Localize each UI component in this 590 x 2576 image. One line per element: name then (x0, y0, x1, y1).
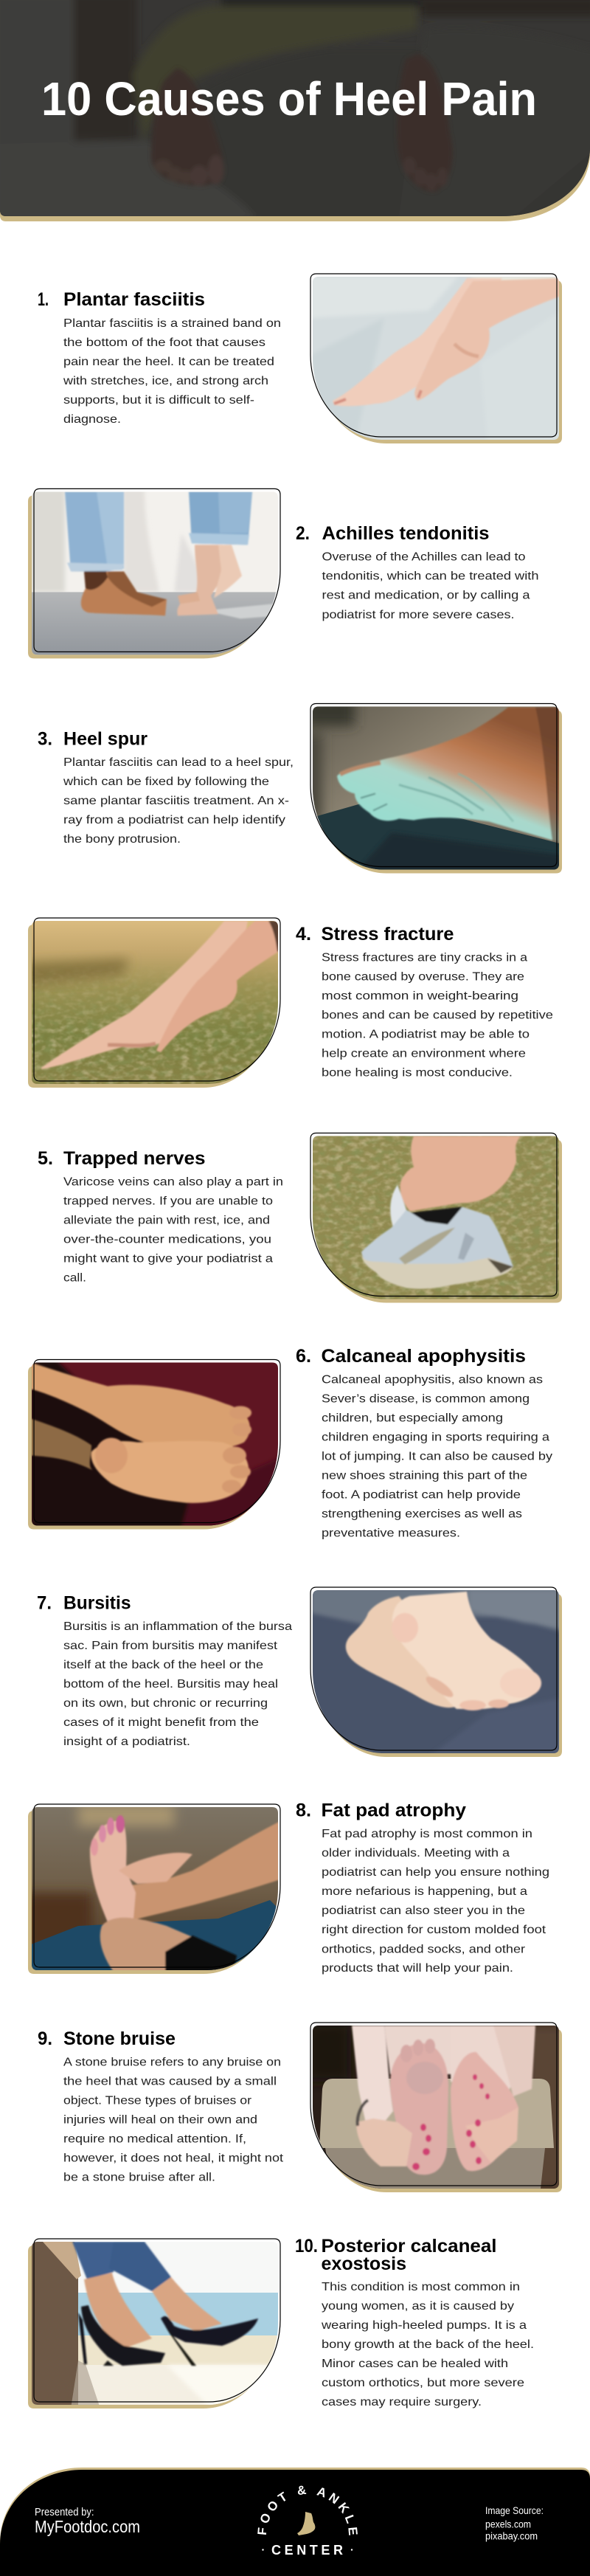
body text 2: tendonitis, which can be treated with (322, 570, 538, 583)
body text 7: Bursitis is an inflammation of the bursa (63, 1620, 292, 1633)
body text 4: bone healing is most conducive. (322, 1067, 513, 1080)
body text 8: right direction for custom molded foot (322, 1924, 546, 1936)
body text 5: call. (63, 1272, 86, 1284)
presented by (35, 2507, 140, 2536)
body text 8: older individuals. Meeting with a (322, 1847, 510, 1860)
body text 9: however, it does not heal, it might not (63, 2152, 284, 2165)
body text 3: Plantar fasciitis can lead to a heel spur, (63, 756, 294, 769)
body text 8: orthotics, padded socks, and other (322, 1944, 526, 1955)
logo: Foot & Ankle Center: FOOT & ANKLE (257, 2485, 358, 2535)
body text 10 (321, 2281, 534, 2408)
body text 3: which can be fixed by following the (63, 776, 269, 788)
photo 3: foot sole with teal lighting (303, 697, 565, 874)
body text 3 (63, 756, 294, 846)
body text 3: the bony protrusion. (63, 833, 181, 846)
photo 9: soles resting on a beige stool, pink nails (307, 2023, 569, 2192)
heading 8: 8. (296, 1800, 311, 1821)
body text 8: podiatrist can help you ensure nothing (322, 1866, 549, 1879)
image source: pixabay.com (485, 2530, 538, 2542)
icon: gold foot (297, 2512, 315, 2535)
body text 5: might want to give your podiatrist a (63, 1253, 273, 1265)
photo 10: high heels by the sea (28, 2239, 285, 2408)
body text 10: wearing high-heeled pumps. It is a (321, 2319, 527, 2332)
body text 5: Varicose veins can also play a part in (63, 1176, 283, 1188)
logo: Foot & Ankle Center: CENTER (271, 2543, 343, 2558)
body text 10: This condition is most common in (322, 2281, 520, 2293)
body text 10: Minor cases can be healed with (322, 2358, 508, 2370)
heading 4: 4. (296, 924, 311, 945)
heading 5: Trapped nerves (63, 1148, 205, 1169)
body text 10: cases may require surgery. (322, 2396, 482, 2408)
body text 1: with stretches, ice, and strong arch (63, 375, 268, 387)
image source (485, 2504, 544, 2542)
heading 9: 9. (38, 2028, 52, 2049)
heading 10: exostosis (322, 2254, 406, 2274)
header photo: feet on a bed, darkened (0, 0, 590, 221)
body text 6: lot of jumping. It can also be caused by (322, 1451, 552, 1463)
body text 7: on its own, but chronic or recurring (63, 1697, 268, 1710)
panel: 1 Plantar fasciitis (38, 274, 562, 443)
panel: 2 Achilles tendonitis (28, 488, 538, 658)
presented by: Presented by: (35, 2507, 94, 2518)
body text 5: alleviate the pain with rest, ice, and (63, 1215, 270, 1226)
body text 1: Plantar fasciitis is a strained band on (63, 317, 281, 330)
footer (0, 2468, 590, 2576)
body text 6 (322, 1374, 552, 1539)
header banner (0, 0, 590, 221)
body text 4: bone caused by overuse. They are (322, 970, 524, 983)
body text 6: Calcaneal apophysitis, also known as (322, 1374, 543, 1387)
body text 2: Overuse of the Achilles can lead to (322, 551, 526, 564)
body text 1 (63, 317, 281, 426)
body text 7 (63, 1620, 292, 1748)
panel: 4 Stress fracture (27, 918, 553, 1088)
heading 7: Bursitis (63, 1592, 131, 1613)
body text 10: young women, as it is caused by (322, 2300, 514, 2313)
panel: 3 Heel spur (38, 697, 565, 874)
body text 4: Stress fractures are tiny cracks in a (322, 951, 527, 964)
panel: 10 Posterior calcaneal exostosis (28, 2236, 534, 2408)
body text 4: help create an environment where (322, 1048, 526, 1060)
presented by: MyFootdoc.com (35, 2517, 140, 2536)
logo: Foot & Ankle Center (257, 2485, 358, 2558)
heading 10: Posterior calcaneal (322, 2236, 497, 2256)
body text 3: ray from a podiatrist can help identify (63, 814, 285, 826)
body text 8 (322, 1828, 549, 1975)
body text 8: Fat pad atrophy is most common in (322, 1828, 532, 1840)
photo 1: bare feet on white sheets (310, 274, 562, 443)
body text 9: A stone bruise refers to any bruise on (63, 2057, 281, 2069)
body text 5 (63, 1176, 283, 1284)
body text 6: new shoes straining this part of the (322, 1470, 527, 1482)
body text 6: foot. A podiatrist can help provide (322, 1489, 521, 1502)
body text 4: motion. A podiatrist may be able to (322, 1029, 530, 1041)
photo 8: hands massaging a foot on a yoga mat (27, 1804, 285, 1975)
heading 6: Calcaneal apophysitis (322, 1346, 526, 1367)
body text 2: rest and medication, or by calling a (322, 590, 530, 602)
photo 7: crossed soles on blue-grey bedding (310, 1587, 562, 1757)
body text 5: trapped nerves. If you are unable to (63, 1195, 273, 1207)
body text 6: children engaging in sports requiring a (322, 1432, 549, 1444)
body text 9: object. These types of bruises or (63, 2095, 252, 2107)
body text 7: insight of a podiatrist. (63, 1736, 190, 1748)
body text 2 (322, 551, 538, 621)
body text 8: podiatrist can also steer you in the (322, 1905, 525, 1917)
panel: 8 Fat pad atrophy (27, 1800, 549, 1975)
body text 7: bottom of the heel. Bursitis may heal (63, 1678, 278, 1691)
body text 7: cases of it might benefit from the (63, 1716, 259, 1729)
image source: Image Source: (485, 2504, 544, 2516)
panel: 9 Stone bruise (38, 2023, 569, 2192)
panel: 6 Calcaneal apophysitis (28, 1346, 552, 1539)
body text 6: Sever’s disease, is common among (322, 1393, 530, 1406)
photo 2: two pairs of feet in jeans (28, 488, 282, 658)
body text 6: strengthening exercises as well as (322, 1508, 522, 1520)
body text 1: the bottom of the foot that causes (63, 336, 266, 349)
title: 10 Causes of Heel Pain (41, 72, 537, 125)
body text 9: be a stone bruise after all. (63, 2172, 215, 2184)
body text 9: the heel that was caused by a small (63, 2076, 277, 2088)
heading 1: Plantar fasciitis (63, 289, 205, 310)
photo 5: hand pulling on a sneaker on grass (310, 1133, 562, 1303)
body text 3: same plantar fasciitis treatment. An x- (63, 795, 289, 807)
heading 10: 10. (295, 2236, 318, 2256)
photo 4: feet on grass (27, 918, 285, 1088)
body text 2: podiatrist for more severe cases. (322, 609, 515, 621)
heading 4: Stress fracture (322, 924, 454, 945)
body text 7: sac. Pain from bursitis may manifest (63, 1640, 278, 1652)
body text 6: preventative measures. (322, 1527, 460, 1539)
body text 5: over-the-counter medications, you (63, 1234, 271, 1246)
heading 6: 6. (296, 1346, 311, 1367)
foot right (397, 54, 453, 192)
body text 8: products that will help your pain. (322, 1962, 513, 1975)
heading 7: 7. (37, 1592, 52, 1613)
image source: pexels.com (485, 2518, 531, 2530)
panel: 5 Trapped nerves (38, 1133, 562, 1303)
body text 1: diagnose. (63, 413, 121, 426)
body text 9: require no medical attention. If, (63, 2133, 246, 2146)
body text 9 (63, 2057, 284, 2184)
body text 4: most common in weight-bearing (322, 990, 518, 1002)
body text 1: supports, but it is difficult to self- (63, 394, 254, 407)
heading 3: 3. (38, 728, 52, 749)
heading 5: 5. (38, 1148, 53, 1169)
panel: 7 Bursitis (37, 1587, 562, 1757)
heading 9: Stone bruise (63, 2028, 176, 2049)
body text 1: pain near the heel. It can be treated (63, 356, 274, 368)
heading 1: 1. (38, 289, 49, 310)
body text 4 (322, 951, 553, 1080)
heading 2: Achilles tendonitis (322, 523, 490, 544)
heading 2: 2. (296, 523, 310, 544)
body text 6: children, but especially among (322, 1412, 503, 1425)
photo 6: two soles on a maroon blanket (28, 1359, 285, 1529)
body text 9: injuries will heal on their own and (63, 2114, 257, 2127)
foot left (151, 54, 453, 192)
heading 10 (295, 2236, 497, 2274)
body text 8: more nefarious is happening, but a (322, 1885, 527, 1898)
body text 7: itself at the back of the heel or the (63, 1659, 263, 1671)
body text 10: custom orthotics, but more severe (322, 2377, 524, 2389)
heading 3: Heel spur (63, 728, 148, 749)
body text 4: bones and can be caused by repetitive (322, 1009, 553, 1021)
heading 8: Fat pad atrophy (322, 1800, 466, 1821)
body text 10: bony growth at the back of the heel. (322, 2338, 534, 2351)
